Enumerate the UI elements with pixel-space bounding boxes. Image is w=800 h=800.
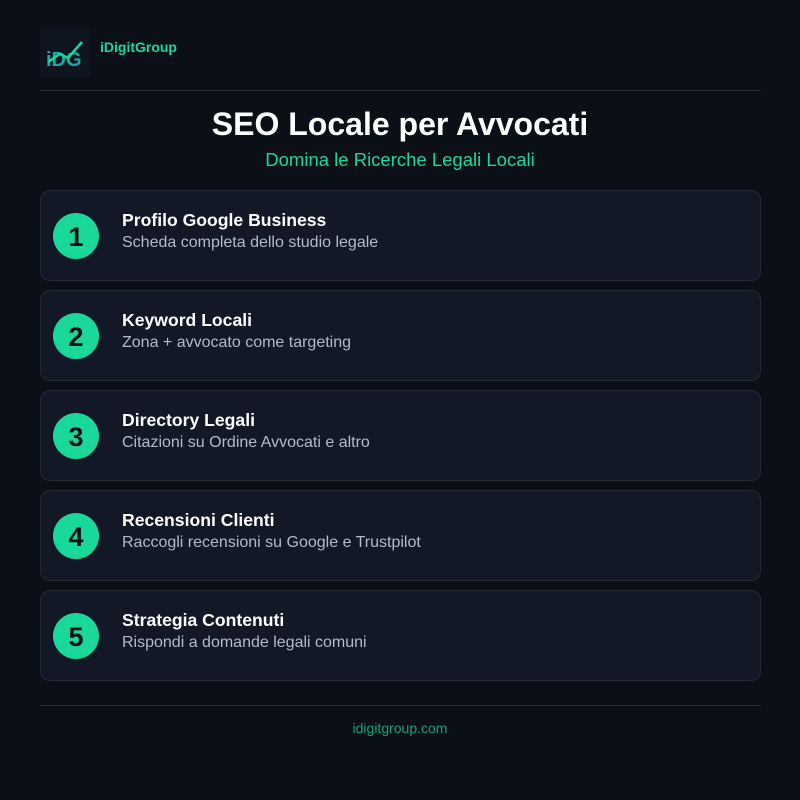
card 5: Strategia Contenuti — [122, 610, 284, 630]
logo: iDG — [46, 49, 82, 71]
card 3: Directory Legali — [122, 410, 255, 430]
card 3 — [40, 390, 761, 481]
card 1: Profilo Google Business — [122, 210, 326, 230]
title: SEO Locale per Avvocati — [212, 106, 588, 142]
card 5 — [40, 590, 761, 681]
card 5: 5 — [68, 622, 84, 652]
card 2 — [40, 290, 761, 381]
card 4: Recensioni Clienti — [122, 510, 275, 530]
card 2: Keyword Locali — [122, 310, 252, 330]
footer: idigitgroup.com — [353, 720, 447, 736]
card 1: Scheda completa dello studio legale — [122, 234, 378, 251]
card 1 — [40, 190, 761, 281]
card 2: 2 — [68, 322, 84, 352]
brand name: iDigitGroup — [100, 39, 177, 55]
card 5: Rispondi a domande legali comuni — [122, 634, 367, 651]
card 4: Raccogli recensioni su Google e Trustpilot — [122, 534, 421, 551]
card 4 — [40, 490, 761, 581]
logo — [40, 28, 90, 78]
card 1: 1 — [68, 222, 84, 252]
card 2: Zona + avvocato come targeting — [122, 334, 351, 351]
card 3: 3 — [68, 422, 84, 452]
subtitle: Domina le Ricerche Legali Locali — [265, 149, 535, 170]
card 4: 4 — [68, 522, 84, 552]
card 3: Citazioni su Ordine Avvocati e altro — [122, 434, 370, 451]
